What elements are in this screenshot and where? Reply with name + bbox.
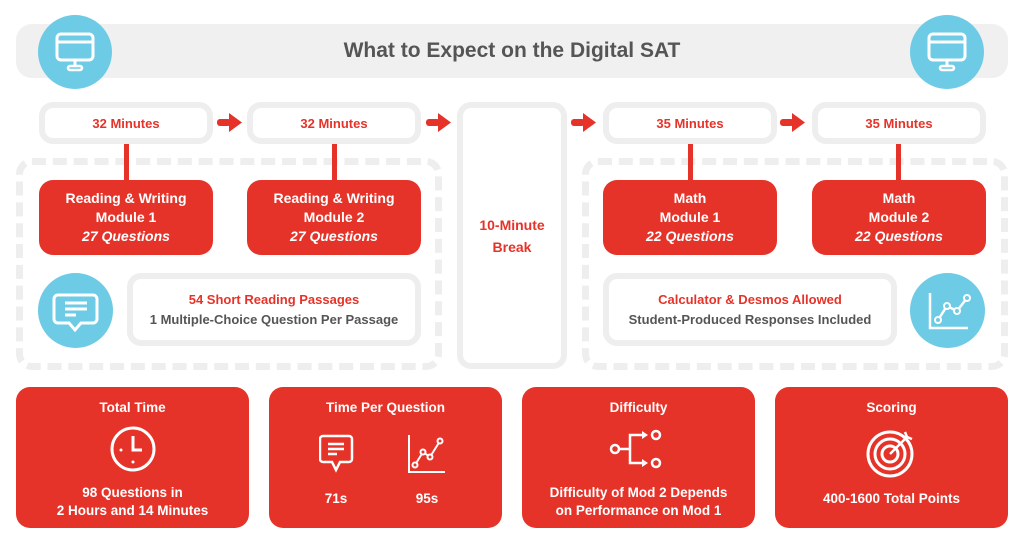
icon: graph [408,435,445,473]
arrow 4 [780,113,805,132]
module: Math 1: Module 1 [660,209,720,225]
card: scoring: Scoring [866,400,917,415]
icon: monitor right [910,15,984,89]
time box 3 [603,102,777,144]
info box: reading [127,273,421,346]
time box 1: 32 Minutes [92,116,160,130]
break box: Break [493,238,531,254]
icon: chat bubble [38,273,113,348]
card: time per question: 95s [416,491,438,506]
module: Math 1: 22 Questions [646,228,734,244]
title bar [16,24,1008,78]
time box 4: 35 Minutes [865,116,933,130]
time box 2 [247,102,421,144]
stems [124,144,129,182]
module: RW 1: Module 1 [96,209,156,225]
card: difficulty [522,387,755,528]
card: scoring [775,387,1008,528]
info box: math [603,273,897,346]
time box 3: 35 Minutes [656,116,724,130]
title bar: What to Expect on the Digital SAT [344,39,680,62]
info box: reading: 1 Multiple-Choice Question Per Passage [150,312,398,326]
module: RW 1: 27 Questions [82,228,170,244]
module: RW 2 [247,180,421,255]
card: time per question: Time Per Question [326,400,445,415]
time box 1 [39,102,213,144]
break box: 10-Minute [479,216,545,232]
arrow 2 [426,113,451,132]
dashed region: math [582,158,1008,370]
card: difficulty: Difficulty [610,400,667,415]
module: RW 2: 27 Questions [290,228,378,244]
time box 2: 32 Minutes [300,116,368,130]
module: RW 1: Reading & Writing [65,190,187,206]
module: Math 2 [812,180,986,255]
info box: reading: 54 Short Reading Passages [189,292,359,306]
info box: math: Student-Produced Responses Included [629,312,871,326]
module: Math 2: 22 Questions [855,228,943,244]
module: RW 2: Reading & Writing [273,190,395,206]
card: total time: 2 Hours and 14 Minutes [57,503,208,518]
dashed region: reading & writing [16,158,442,370]
module: RW 1 [39,180,213,255]
card: total time [16,387,249,528]
icon: graph [910,273,985,348]
module: Math 1 [603,180,777,255]
module: Math 1: Math [674,190,706,206]
card: difficulty: on Performance on Mod 1 [556,503,721,518]
icon: monitor left [38,15,112,89]
card: time per question: 71s [325,491,347,506]
card: scoring: 400-1600 Total Points [823,491,960,506]
arrow 1 [217,113,242,132]
card: total time: Total Time [99,400,166,415]
arrow 3 [571,113,596,132]
icon: clock [110,426,156,472]
module: Math 2: Math [883,190,915,206]
icon: target [866,430,914,478]
module: Math 2: Module 2 [869,209,929,225]
icon: chat [319,434,354,473]
time box 4 [812,102,986,144]
card: difficulty: Difficulty of Mod 2 Depends [550,485,727,500]
module: RW 2: Module 2 [304,209,364,225]
card: total time: 98 Questions in [82,485,183,500]
arrows [217,113,805,132]
card: time per question [269,387,502,528]
info box: math: Calculator & Desmos Allowed [658,292,842,306]
break box [457,102,567,369]
icon: branching [610,430,662,468]
